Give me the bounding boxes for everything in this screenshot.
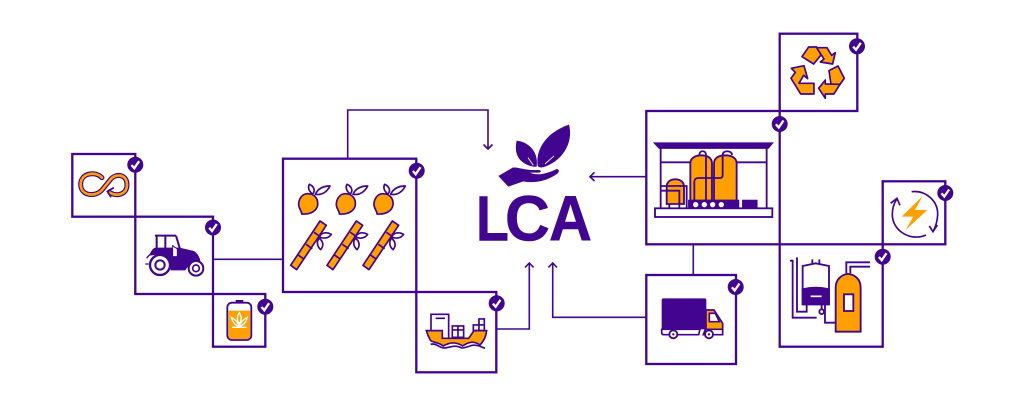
icon: delivery truck [662,298,723,338]
box: energy [883,181,945,244]
check: recycling [849,38,865,54]
text: LCA: L [476,182,509,255]
box: crops [283,159,416,292]
box: battery [213,294,265,347]
check: circular economy [127,157,143,173]
icon: hand holding leaves [498,125,570,187]
arrow: crops to LCA [348,110,492,158]
box: factory [646,111,780,244]
icon: biofuel battery [227,300,251,340]
icon: fruits and sugar cane [291,184,405,270]
text: LCA: A [549,184,592,255]
check: ship [489,295,505,311]
icon: infinity loop [81,174,127,197]
arrow: ship to LCA [497,263,534,329]
icon: recycling symbol [791,47,844,98]
icon: renewable energy bolt [891,192,938,237]
icon: cargo ship [426,314,487,348]
check: battery [257,299,273,315]
icon: boiler and tank [790,257,870,332]
box: heating equipment [780,244,883,347]
text: LCA [476,182,592,255]
check: energy [937,185,953,201]
box: recycling [780,34,857,111]
connector: factory to truck [692,244,694,275]
box: ship [416,292,496,372]
arrow: factory to LCA [590,172,646,181]
icon: tractor [145,236,203,276]
connector: tractor to crops [213,258,283,260]
check: crops [409,163,425,179]
check: heating equipment [875,249,891,265]
connector arrows [213,110,693,329]
icon: factory [655,143,772,217]
check: truck [728,279,744,295]
check: factory [772,116,788,132]
logo: LCA hand and leaves [476,125,592,255]
boxes [72,34,945,372]
box: truck [646,275,736,364]
arrow: truck to LCA [548,263,646,317]
check: tractor [205,220,221,236]
box: tractor [135,217,213,294]
box: circular economy [72,154,135,217]
status checks [127,38,953,315]
text: LCA: C [505,184,550,255]
